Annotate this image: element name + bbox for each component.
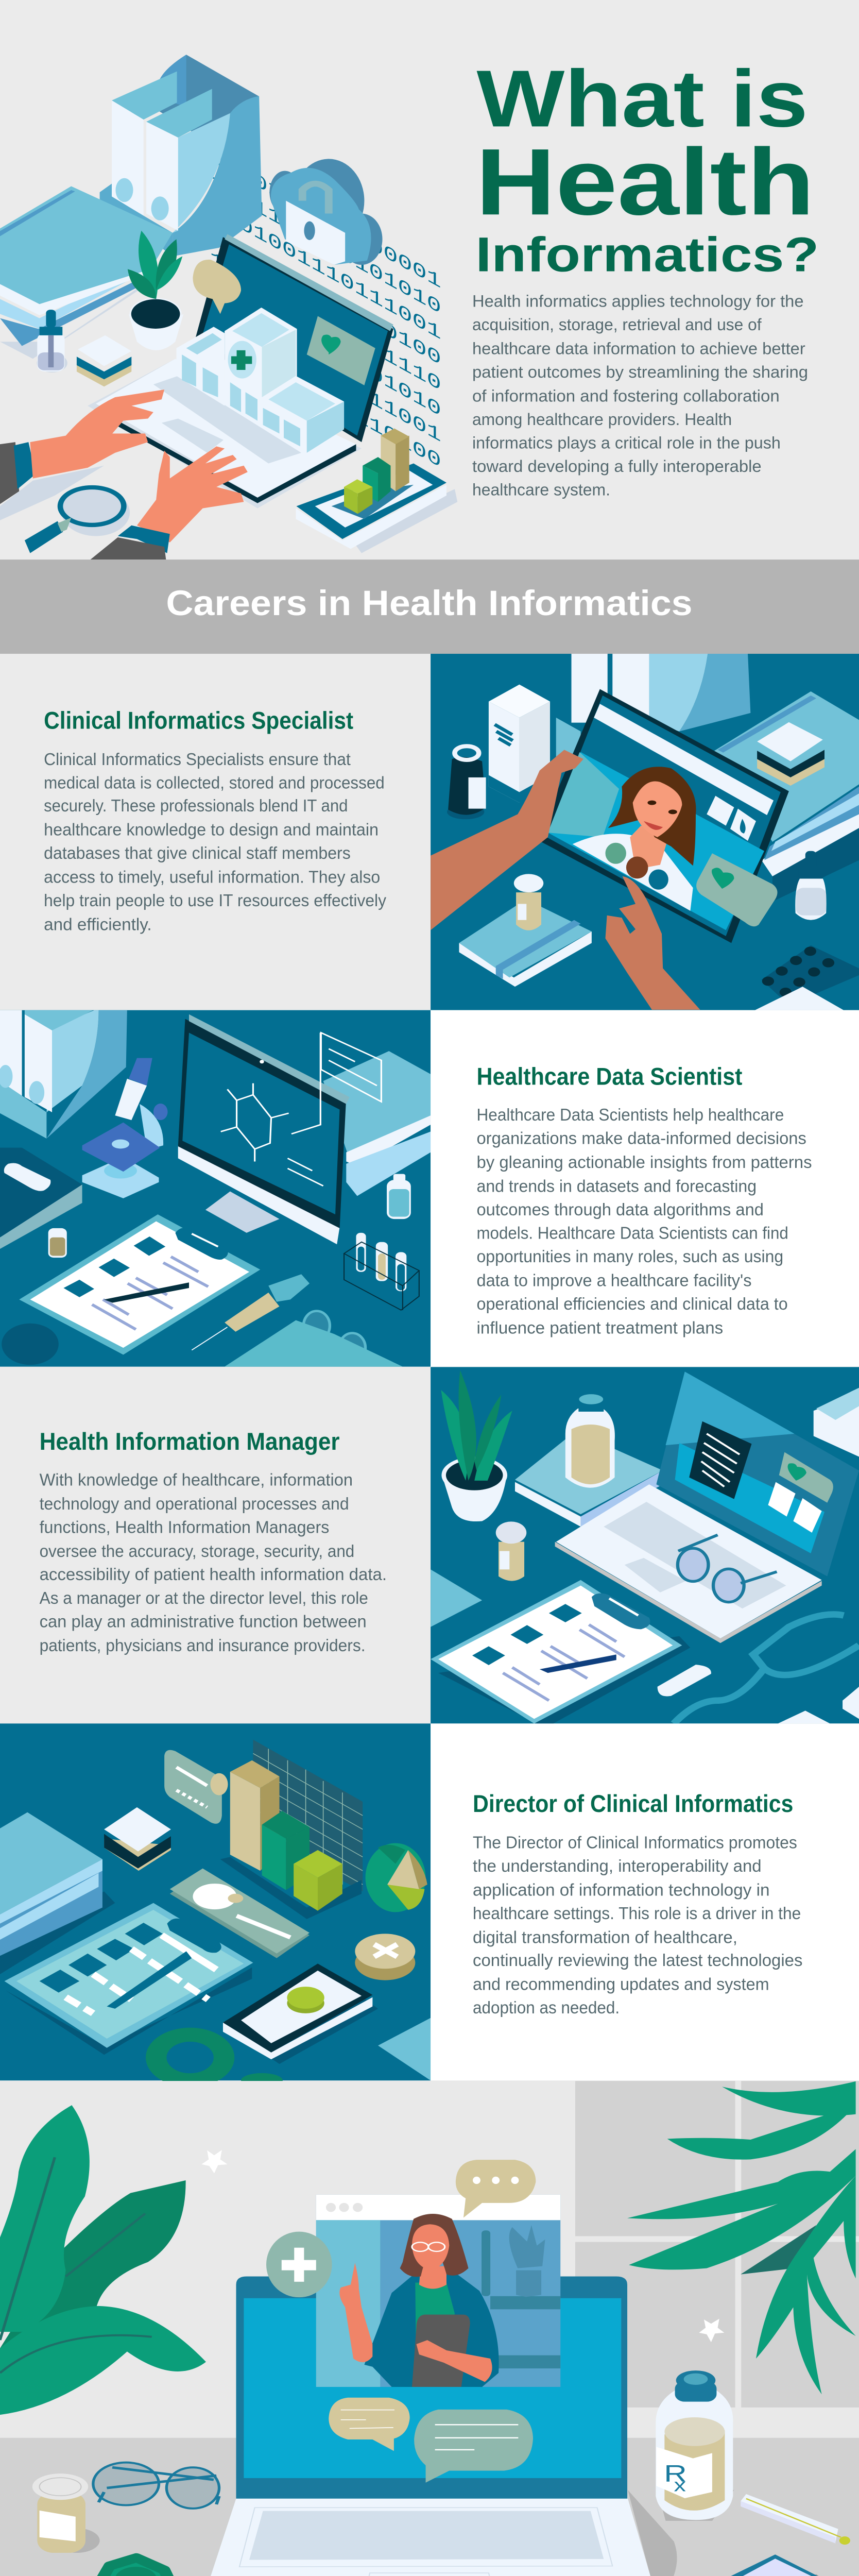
- text panel: Clinical Informatics Specialist: [0, 654, 431, 1010]
- icon: corner shape: [378, 2018, 431, 2080]
- icon: potted plant: [441, 1370, 512, 1521]
- icon: corner shape: [431, 1569, 482, 1627]
- icon: book stack: [712, 691, 859, 902]
- text panel: Clinical Informatics Specialist: help train people to use IT resources effectively: [44, 891, 387, 910]
- icon: binary digits wall: 1000100111011110: [210, 247, 441, 397]
- icon: medicine bottle: [447, 746, 486, 819]
- icon: rx bottle: [656, 2370, 734, 2521]
- icon: magnifying glass: [25, 487, 130, 553]
- illustration: analytics desk: [0, 1723, 431, 2088]
- icon: stacked notes: [104, 1807, 171, 1871]
- icon: phone with check: [223, 1963, 378, 2064]
- text panel: Health Information Manager: oversee the accuracy, storage, security, and: [40, 1541, 354, 1561]
- icon: glasses: [93, 2463, 219, 2509]
- heading band: careers: [0, 560, 859, 654]
- text panel: Health Information Manager: As a manager or at the director level, this role: [40, 1588, 368, 1607]
- icon: laptop: [201, 2277, 677, 2576]
- icon: binary digits wall: 0100101110111001: [210, 298, 441, 448]
- icon: small gear: [241, 2073, 283, 2088]
- illustration: records laptop desk: [431, 1367, 859, 1723]
- icon: phone with bar chart: [296, 429, 457, 553]
- text panel: Clinical Informatics Specialist: healthcare knowledge to design and maintain: [44, 820, 379, 839]
- text panel: Director of Clinical Informatics: application of information technology in: [473, 1880, 770, 1900]
- icon: dropper bottle: [795, 851, 827, 920]
- icon: pie chart: [366, 1843, 427, 1912]
- icon: book dark: [0, 1148, 82, 1238]
- icon: login card: [164, 1750, 228, 1824]
- icon: folder edge: [0, 1184, 82, 1249]
- icon: tablet with doctor: [537, 689, 789, 943]
- icon: pill bottle: [496, 1521, 526, 1581]
- icon: star: [201, 2150, 227, 2173]
- icon: cloud lock: [269, 159, 383, 265]
- text panel: Health Information Manager: patients, physicians and insurance providers.: [40, 1636, 366, 1655]
- icon: hanging plant right: [627, 2081, 856, 2394]
- text block: hero description: acquisition, storage, retrieval and use of: [472, 315, 762, 334]
- text panel: Health Information Manager: can play an administrative function between: [40, 1612, 367, 1631]
- icon: checklist tablet: [5, 1903, 253, 2055]
- text block: hero description: of information and fostering collaboration: [472, 386, 780, 405]
- text panel: Director of Clinical Informatics: the understanding, interoperability and: [473, 1856, 762, 1875]
- icon: white box: [489, 685, 550, 803]
- icon: binary digits wall: 0000111110100001: [210, 145, 441, 294]
- icon: binary digits wall: 1000010100100100: [210, 222, 441, 371]
- icon: star: [699, 2319, 724, 2342]
- text panel: Director of Clinical Informatics: adoption as needed.: [473, 1998, 620, 2017]
- icon: bandage: [658, 1665, 711, 1697]
- icon: right hand: [91, 446, 248, 560]
- text panel: Health Information Manager: Health Information Manager: [40, 1428, 340, 1455]
- text panel: Clinical Informatics Specialist: Clinical Informatics Specialists ensure that: [44, 750, 351, 769]
- text block: hero description: healthcare system.: [472, 480, 610, 499]
- icon: potted plant: [128, 231, 183, 350]
- icon: folder organizer: [100, 55, 262, 256]
- icon: clipboard checklist: [431, 1580, 690, 1723]
- title: [475, 54, 819, 282]
- title: Informatics?: [475, 228, 819, 282]
- icon: binary digits wall: 1101001110111001: [210, 196, 441, 345]
- icon: video window with doctor: [316, 2195, 560, 2387]
- icon: dropper bottle: [37, 310, 67, 372]
- icon: paper corner: [778, 1710, 830, 1723]
- icon: x button: [355, 1934, 415, 1980]
- icon: heart card: [696, 853, 778, 926]
- icon: grid chart: [253, 1740, 363, 1891]
- icon: heart: [712, 868, 734, 889]
- hero illustration: [0, 55, 457, 560]
- icon: chat bubble: [193, 260, 241, 314]
- icon: folder corner: [814, 1388, 859, 1457]
- icon: notes corner: [843, 1687, 859, 1719]
- icon: syringe: [192, 1274, 310, 1350]
- icon: clipboard checklist: [19, 1214, 260, 1354]
- text panel: Clinical Informatics Specialist: access to timely, useful information. They also: [44, 867, 380, 887]
- icon: thermometer: [741, 2494, 850, 2545]
- icon: chat bubble tan: [329, 2398, 410, 2451]
- icon: stack of books: [0, 186, 173, 359]
- icon: large gear: [97, 2558, 194, 2576]
- panel: hero: [0, 54, 859, 654]
- text panel: Healthcare Data Scientist: influence patient treatment plans: [476, 1318, 723, 1337]
- text panel: Health Information Manager: [0, 1367, 431, 1723]
- text panel: Director of Clinical Informatics: continually reviewing the latest technologies: [473, 1951, 802, 1970]
- icon: typing bubble: [456, 2160, 536, 2218]
- icon: magnifier: [2, 1324, 59, 1365]
- text panel: Healthcare Data Scientist: Healthcare Data Scientist: [476, 1063, 742, 1090]
- icon: monitor: [178, 1014, 381, 1244]
- icon: profile card: [170, 1869, 310, 1958]
- icon: left hand: [0, 389, 164, 520]
- text panel: Healthcare Data Scientist: opportunities in many roles, such as using: [476, 1247, 783, 1266]
- icon: rx bottle: x: [674, 2475, 686, 2495]
- text panel: Director of Clinical Informatics: and recommending updates and system: [473, 1974, 769, 1994]
- icon: pill bottle: [514, 874, 543, 930]
- icon: large plant left: [0, 2105, 206, 2415]
- icon: glasses: [678, 1535, 777, 1602]
- text block: hero description: toward developing a fully interoperable: [472, 457, 762, 476]
- illustration: data scientist desk: [0, 1010, 431, 1367]
- text panel: Health Information Manager: With knowledge of healthcare, information: [40, 1470, 353, 1489]
- icon: microscope: [82, 1058, 168, 1198]
- icon: binary digits wall: 1001001010101010: [210, 273, 441, 422]
- icon: large gear: [156, 2035, 224, 2080]
- icon: books: [323, 1051, 431, 1196]
- text panel: Healthcare Data Scientist: data to improve a healthcare facility's: [476, 1270, 752, 1290]
- title: Health: [475, 129, 815, 234]
- icon: hospital building: [177, 308, 344, 453]
- text panel: Health Information Manager: functions, Health Information Managers: [40, 1518, 329, 1537]
- icon: stacked notes: [77, 335, 131, 386]
- heading band: careers: Careers in Health Informatics: [166, 583, 693, 623]
- panel: virtual care scene: [0, 2081, 859, 2576]
- icon: bar chart: [220, 1760, 362, 1919]
- text panel: Director of Clinical Informatics: [431, 1723, 859, 2080]
- icon: chat bubble sage: [414, 2410, 533, 2483]
- icon: plus badge: [266, 2232, 332, 2297]
- icon: laptop: [555, 1371, 859, 1643]
- text panel: Clinical Informatics Specialist: Clinical Informatics Specialist: [44, 707, 353, 734]
- icon: binary digits wall: 0010110100110100: [210, 324, 441, 473]
- icon: stacked books: [0, 1812, 115, 1974]
- icon: test tube rack: [344, 1233, 419, 1310]
- text panel: Healthcare Data Scientist: and trends in datasets and forecasting: [476, 1176, 757, 1196]
- illustration: telehealth tablet: [431, 654, 859, 1010]
- text panel: Health Information Manager: technology and operational processes and: [40, 1494, 349, 1513]
- icon: book: [515, 1431, 663, 1528]
- window: [575, 2081, 859, 2408]
- icon: hands holding tablet: [431, 750, 700, 1010]
- wall background: [0, 2081, 859, 2438]
- icon: glasses: [303, 1311, 366, 1363]
- text panel: Healthcare Data Scientist: models. Healthcare Data Scientists can find: [476, 1223, 788, 1243]
- icon: folder organizer: [0, 1010, 127, 1139]
- text panel: Healthcare Data Scientist: Healthcare Data Scientists help healthcare: [476, 1105, 784, 1124]
- icon: binary digits wall: [210, 145, 441, 473]
- icon: binary digits wall: 1001101110101010: [210, 170, 441, 319]
- icon: bottle: [387, 1174, 411, 1219]
- icon: label plate: [4, 1163, 50, 1191]
- icon: pill bottle: [32, 2473, 100, 2553]
- text panel: Health Information Manager: accessibility of patient health information data.: [40, 1565, 387, 1584]
- text block: hero description: informatics plays a critical role in the push: [472, 433, 781, 452]
- icon: notes stack: [757, 722, 824, 786]
- text panel: Healthcare Data Scientist: outcomes through data algorithms and: [476, 1200, 764, 1219]
- text panel: Director of Clinical Informatics: digital transformation of healthcare,: [473, 1927, 737, 1947]
- icon: notebook: [459, 900, 592, 987]
- text block: hero description: among healthcare providers. Health: [472, 410, 732, 429]
- icon: phone: [674, 2554, 838, 2576]
- icon: corner shape: [225, 1320, 403, 1367]
- icon: pill blister: [762, 945, 859, 1005]
- text panel: Healthcare Data Scientist: operational efficiencies and clinical data to: [476, 1294, 788, 1313]
- icon: rx bottle: R: [664, 2461, 687, 2487]
- icon: large bottle: [565, 1394, 615, 1488]
- panel: careers row 3 and 4: [0, 1367, 859, 2081]
- text panel: Clinical Informatics Specialist: securely. These professionals blend IT and: [44, 796, 348, 815]
- panel: careers row 1 and 2: [0, 654, 859, 1367]
- desk: [0, 2438, 859, 2576]
- icon: laptop: [88, 234, 393, 509]
- title: What is: [476, 54, 808, 144]
- icon: stethoscope: [674, 1615, 859, 1723]
- icon: pill bottle: [48, 1228, 67, 1258]
- text block: hero description: [472, 292, 808, 499]
- text panel: Healthcare Data Scientist: [431, 1010, 859, 1367]
- text panel: Clinical Informatics Specialist: databases that give clinical staff members: [44, 843, 351, 862]
- text panel: Clinical Informatics Specialist: and efficiently.: [44, 914, 152, 934]
- text panel: Clinical Informatics Specialist: medical data is collected, stored and processed: [44, 773, 385, 792]
